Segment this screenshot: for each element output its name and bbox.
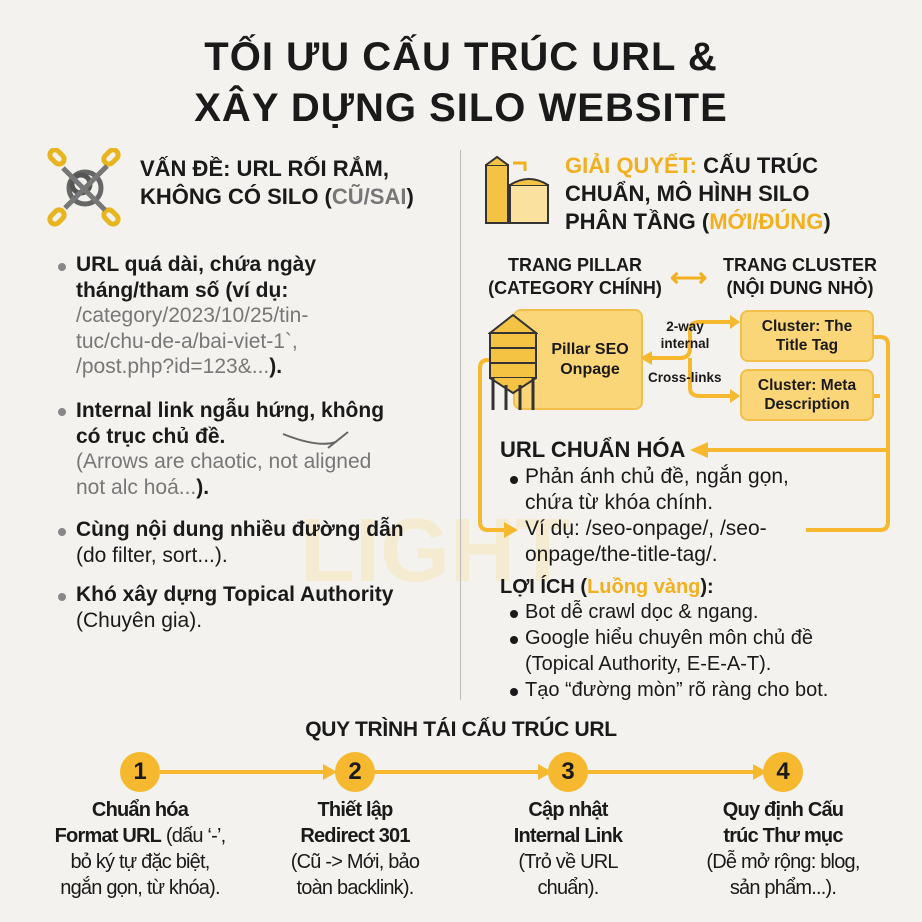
problem list: có trục chủ đề. (76, 424, 225, 448)
title: TỐI ƯU CẤU TRÚC URL & (204, 35, 718, 79)
step 1: 1 (133, 758, 147, 785)
step 2: Redirect 301 (300, 825, 410, 847)
link labels (661, 319, 709, 351)
heading: solution: CHUẨN, MÔ HÌNH SILO (565, 181, 809, 206)
pillar/cluster labels: (CATEGORY CHÍNH) (488, 278, 662, 298)
step 2: toàn backlink). (297, 877, 413, 899)
problem list: /post.php?id=123&...). (76, 355, 282, 378)
cluster box 1: Cluster: The (762, 318, 852, 335)
title: XÂY DỰNG SILO WEBSITE (194, 86, 728, 130)
problem list: (Arrows are chaotic, not aligned (76, 450, 371, 473)
url standard (500, 436, 789, 566)
cluster box 1: Title Tag (776, 337, 838, 354)
cluster box 2: Description (764, 396, 850, 413)
heading: solution: PHÂN TẦNG (MỚI/ĐÚNG) (565, 209, 831, 234)
heading: solution: GIẢI QUYẾT: CẤU TRÚC (565, 153, 818, 178)
heading: solution (565, 153, 831, 234)
problem list: (Chuyên gia). (76, 608, 202, 632)
problem list: (do filter, sort...). (76, 544, 228, 566)
link labels: internal (661, 336, 709, 351)
problem list: Cùng nội dung nhiều đường dẫn (76, 518, 404, 541)
step 1: ngắn gọn, từ khóa). (60, 877, 220, 899)
step 2: 2 (348, 758, 362, 785)
text: TRANG CLUSTER (723, 255, 877, 275)
divider (460, 150, 461, 700)
step 1: Format URL (dấu ‘-’, (55, 825, 225, 847)
process arrows (160, 764, 764, 780)
url standard: chứa từ khóa chính. (525, 491, 713, 514)
benefits: (Topical Authority, E-E-A-T). (525, 653, 771, 675)
pillar box (513, 309, 643, 410)
benefits (500, 575, 828, 701)
problem list: /category/2023/10/25/tin- (76, 304, 308, 327)
link labels: 2-way (666, 319, 704, 334)
problem list: Internal link ngẫu hứng, không (76, 399, 384, 422)
heading: problem: KHÔNG CÓ SILO (CŨ/SAI) (140, 184, 414, 209)
watermark: LIGHT (300, 501, 570, 601)
step 3: chuẩn). (537, 877, 599, 899)
text: (NỘI DUNG NHỎ) (726, 278, 874, 298)
problem list: URL quá dài, chứa ngày (76, 253, 316, 276)
title (194, 34, 728, 130)
benefits: Google hiểu chuyên môn chủ đề (525, 627, 813, 649)
process title: QUY TRÌNH TÁI CẤU TRÚC URL (305, 718, 617, 741)
url standard: URL CHUẨN HÓA (500, 437, 685, 462)
step 1 (55, 752, 225, 899)
text: ⟷ (670, 262, 707, 292)
problem list: tuc/chu-de-a/bai-viet-1`, (76, 330, 298, 352)
step 4 (706, 752, 860, 899)
step 3: 3 (561, 758, 575, 785)
icon: tangled chains (47, 148, 121, 227)
step 4: trúc Thư mục (723, 825, 843, 847)
benefits: Bot dễ crawl dọc & ngang. (525, 601, 758, 623)
icon: silo (488, 314, 538, 410)
problem list: tháng/tham số (ví dụ: (76, 278, 288, 302)
problem list: Khó xây dựng Topical Authority (76, 583, 393, 606)
step 3: Cập nhật (528, 799, 608, 821)
url standard: Ví dụ: /seo-onpage/, /seo- (525, 517, 767, 540)
step 3: (Trỏ về URL (518, 851, 618, 873)
problem list: not alc hoá...). (76, 476, 209, 498)
url standard: onpage/the-title-tag/. (525, 543, 718, 566)
pillar box: Pillar SEO (551, 340, 629, 358)
cluster box 1 (740, 310, 874, 362)
step 1: bỏ ký tự đặc biệt, (70, 851, 210, 873)
pillar/cluster labels: TRANG PILLAR (508, 255, 642, 275)
text: Cross-links (648, 370, 722, 385)
step 2 (291, 752, 420, 899)
problem list (58, 253, 404, 632)
cluster box 2: Cluster: Meta (758, 377, 856, 394)
benefits: Tạo “đường mòn” rõ ràng cho bot. (525, 679, 828, 701)
step 2: (Cũ -> Mới, bảo (291, 851, 419, 873)
url standard: Phản ánh chủ đề, ngắn gọn, (525, 465, 789, 488)
step 3 (514, 752, 623, 899)
step 3: Internal Link (514, 825, 622, 847)
heading: problem: VẤN ĐỀ: URL RỐI RẮM, (140, 156, 389, 181)
icon: silo header (485, 156, 549, 224)
step 2: Thiết lập (317, 799, 393, 821)
step 4: 4 (776, 758, 790, 785)
step 1: Chuẩn hóa (92, 799, 188, 821)
pillar box: Onpage (560, 360, 620, 378)
step 4: (Dễ mở rộng: blog, (706, 851, 860, 873)
icon: chaotic arrows (282, 431, 348, 449)
step 4: Quy định Cấu (723, 799, 843, 821)
step 4: sản phẩm...). (730, 877, 836, 899)
cluster box 2 (740, 369, 874, 421)
benefits: LỢI ÍCH (Luồng vàng): (500, 576, 714, 598)
pillar/cluster labels (488, 255, 662, 298)
heading: problem (140, 156, 414, 209)
